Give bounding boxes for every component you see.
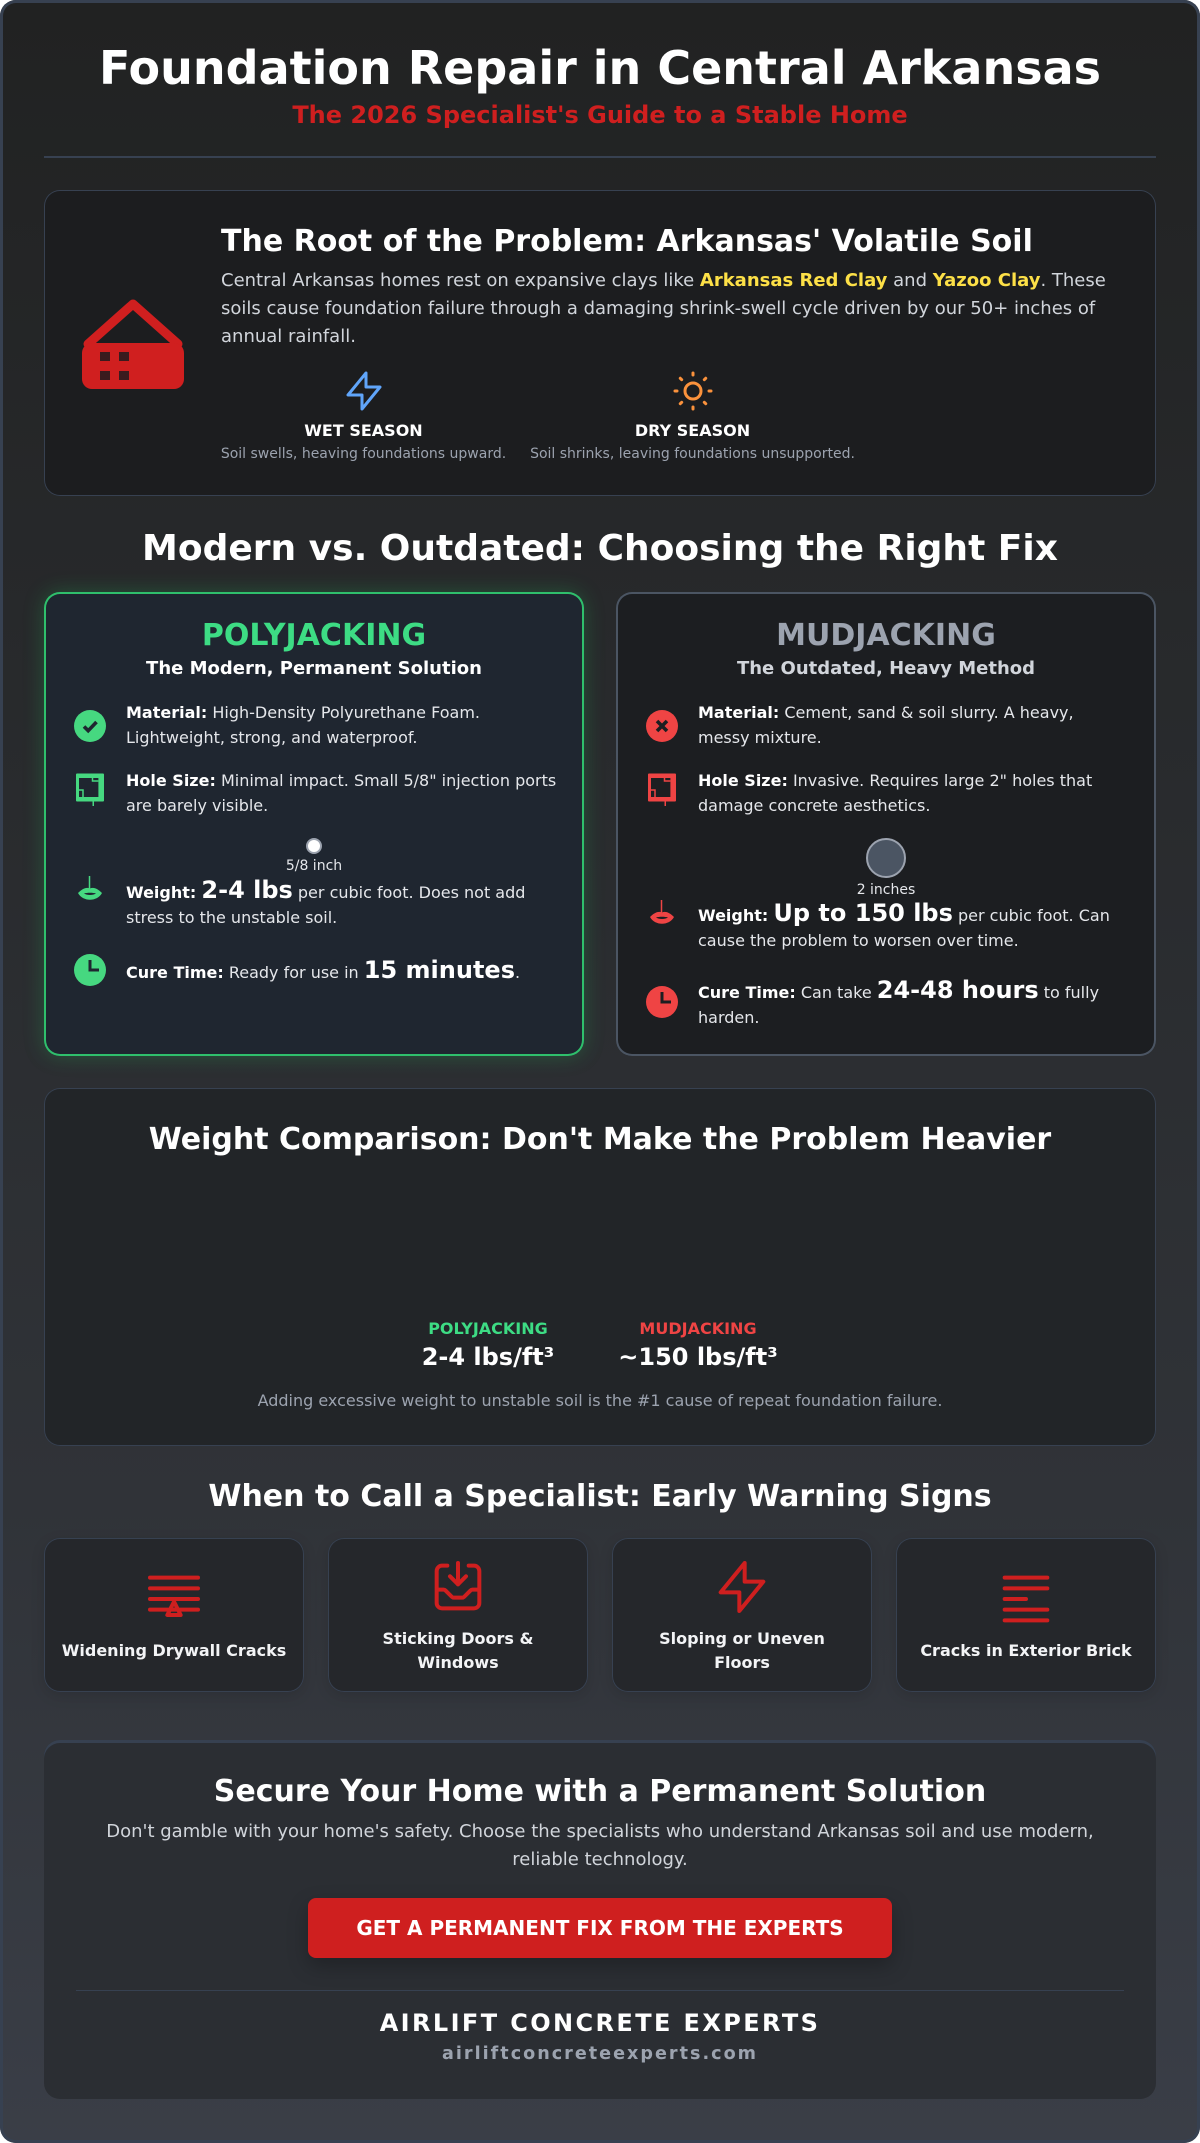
text: hole size bbox=[698, 771, 1092, 815]
title: Foundation Repair in Central Arkansas bbox=[99, 41, 1101, 95]
subheading: polyjacking: The Modern, Permanent Solution bbox=[146, 658, 482, 679]
icon: x circle bbox=[646, 710, 678, 742]
card: exterior brick bbox=[896, 1538, 1156, 1692]
label: drywall cracks: Widening Drywall Cracks bbox=[62, 1641, 286, 1660]
text: material bbox=[698, 703, 1074, 747]
label: polyjacking: POLYJACKING bbox=[428, 1319, 548, 1338]
text: soil description bbox=[221, 270, 1106, 347]
label: mudjacking: MUDJACKING bbox=[639, 1319, 757, 1338]
footer divider bbox=[76, 1990, 1124, 1991]
label: sloping floors: Sloping or Uneven bbox=[659, 1629, 825, 1648]
text: soil description: Central Arkansas homes rest on expansive clays like Arkansas Red Clay and Yazoo Clay. These bbox=[221, 270, 1106, 291]
button: permanent fix bbox=[308, 1898, 892, 1958]
icon: drywall lines bbox=[148, 1576, 200, 1617]
value: 150 lbs/ft3: ~150 lbs/ft³ bbox=[618, 1343, 778, 1371]
text: hole size: damage concrete aesthetics. bbox=[698, 796, 930, 815]
icon: weight bbox=[78, 876, 102, 900]
icon: hole size bbox=[76, 774, 104, 806]
panel: mudjacking bbox=[616, 592, 1156, 1056]
text: hole size: are barely visible. bbox=[126, 796, 268, 815]
diagram: 2 inch hole bbox=[857, 838, 915, 898]
icon: brick lines bbox=[1002, 1576, 1050, 1622]
text: weight: Weight: Up to 150 lbs per cubic foot. Can bbox=[698, 899, 1110, 927]
text: weight bbox=[126, 876, 525, 927]
text: call to action: Don't gamble with your home's safety. Choose the specialists who understand Arkansas soil and use modern, bbox=[106, 1821, 1094, 1842]
label: exterior brick: Cracks in Exterior Brick bbox=[920, 1641, 1132, 1660]
text: material: messy mixture. bbox=[698, 728, 822, 747]
icon: check circle bbox=[74, 710, 106, 742]
text: weight: Weight: 2-4 lbs per cubic foot. Does not add bbox=[126, 876, 525, 904]
panel: polyjacking bbox=[44, 592, 584, 1056]
stat: polyjacking weight bbox=[422, 1319, 554, 1371]
text: material: Material: Cement, sand & soil slurry. A heavy, bbox=[698, 703, 1074, 722]
text: dry season description: Soil shrinks, leaving foundations unsupported. bbox=[530, 446, 855, 462]
text: hole size bbox=[126, 771, 556, 815]
text: call to action: reliable technology. bbox=[512, 1849, 688, 1870]
label: sticking doors: Windows bbox=[417, 1653, 499, 1672]
heading: mudjacking: MUDJACKING bbox=[776, 618, 996, 653]
panel: root of the problem bbox=[44, 190, 1156, 496]
label: sloping floors: Floors bbox=[714, 1653, 770, 1672]
heading: call to action: Secure Your Home with a Permanent Solution bbox=[214, 1774, 986, 1809]
brand name: AIRLIFT CONCRETE EXPERTS bbox=[380, 2009, 820, 2037]
heading: modern vs outdated: Modern vs. Outdated: Choosing the Right Fix bbox=[142, 528, 1058, 569]
label: sloping floors bbox=[659, 1629, 825, 1672]
text: cure time: Cure Time: Can take 24-48 hours to fully bbox=[698, 976, 1099, 1004]
button: permanent fix: GET A PERMANENT FIX FROM THE EXPERTS bbox=[356, 1916, 844, 1940]
website: airliftconcreteexperts.com bbox=[442, 2044, 758, 2064]
heading: root of the problem: The Root of the Problem: Arkansas' Volatile Soil bbox=[221, 224, 1033, 259]
text: soil description: annual rainfall. bbox=[221, 326, 356, 347]
heading: polyjacking: POLYJACKING bbox=[202, 618, 426, 653]
text: cure time: harden. bbox=[698, 1008, 759, 1027]
text: call to action bbox=[106, 1821, 1094, 1870]
label: 5/8 inch: 5/8 inch bbox=[286, 858, 342, 874]
icon: weight bbox=[650, 900, 674, 924]
text: weight: stress to the unstable soil. bbox=[126, 908, 337, 927]
value: 2-4 lbs/ft3: 2-4 lbs/ft³ bbox=[422, 1343, 554, 1371]
circle: small hole bbox=[306, 838, 322, 854]
heading: warning signs: When to Call a Specialist: Early Warning Signs bbox=[208, 1479, 992, 1514]
text: weight bbox=[698, 899, 1110, 950]
panel: weight comparison bbox=[44, 1088, 1156, 1446]
text: weight: cause the problem to worsen over time. bbox=[698, 931, 1019, 950]
text: hole size: Hole Size: Minimal impact. Small 5/8" injection ports bbox=[126, 771, 556, 790]
stat: mudjacking weight bbox=[618, 1319, 778, 1371]
text: material: Material: High-Density Polyurethane Foam. bbox=[126, 703, 480, 722]
text: material bbox=[126, 703, 480, 747]
icon: dry season sun bbox=[674, 372, 712, 410]
text: cure time: Cure Time: Ready for use in 15 minutes. bbox=[126, 956, 520, 984]
card: sloping floors bbox=[612, 1538, 872, 1692]
circle: large hole bbox=[866, 838, 906, 878]
icon: hole size bbox=[648, 774, 676, 806]
text: soil description: soils cause foundation failure through a damaging shrink-swell cycle driven by our 50+ inches of bbox=[221, 298, 1095, 319]
icon: inbox bbox=[434, 1561, 482, 1610]
header divider bbox=[44, 156, 1156, 158]
card: drywall cracks bbox=[44, 1538, 304, 1692]
text: hole size: Hole Size: Invasive. Requires large 2" holes that bbox=[698, 771, 1092, 790]
icon: wet season bolt bbox=[346, 372, 382, 410]
label: sticking doors: Sticking Doors & bbox=[383, 1629, 533, 1648]
icon: house bbox=[82, 300, 184, 389]
subtitle: The 2026 Specialist's Guide to a Stable Home bbox=[292, 101, 908, 129]
label: sticking doors bbox=[383, 1629, 533, 1672]
heading: weight comparison: Weight Comparison: Don't Make the Problem Heavier bbox=[149, 1122, 1051, 1157]
text: wet season description: Soil swells, heaving foundations upward. bbox=[221, 446, 506, 462]
text: cure time bbox=[698, 976, 1099, 1027]
diagram: 5/8 inch hole bbox=[286, 838, 342, 874]
icon: clock bbox=[74, 954, 106, 986]
card: sticking doors bbox=[328, 1538, 588, 1692]
text: material: Lightweight, strong, and waterproof. bbox=[126, 728, 417, 747]
label: 2 inches: 2 inches bbox=[857, 882, 915, 898]
icon: bolt bbox=[718, 1561, 766, 1613]
subheading: mudjacking: The Outdated, Heavy Method bbox=[737, 658, 1035, 679]
label: wet season: WET SEASON bbox=[304, 421, 423, 440]
panel: call to action bbox=[44, 1740, 1156, 2099]
label: dry season: DRY SEASON bbox=[635, 421, 750, 440]
icon: clock bbox=[646, 986, 678, 1018]
caption: repeat failure: Adding excessive weight to unstable soil is the #1 cause of repeat foundation failure. bbox=[258, 1391, 942, 1410]
